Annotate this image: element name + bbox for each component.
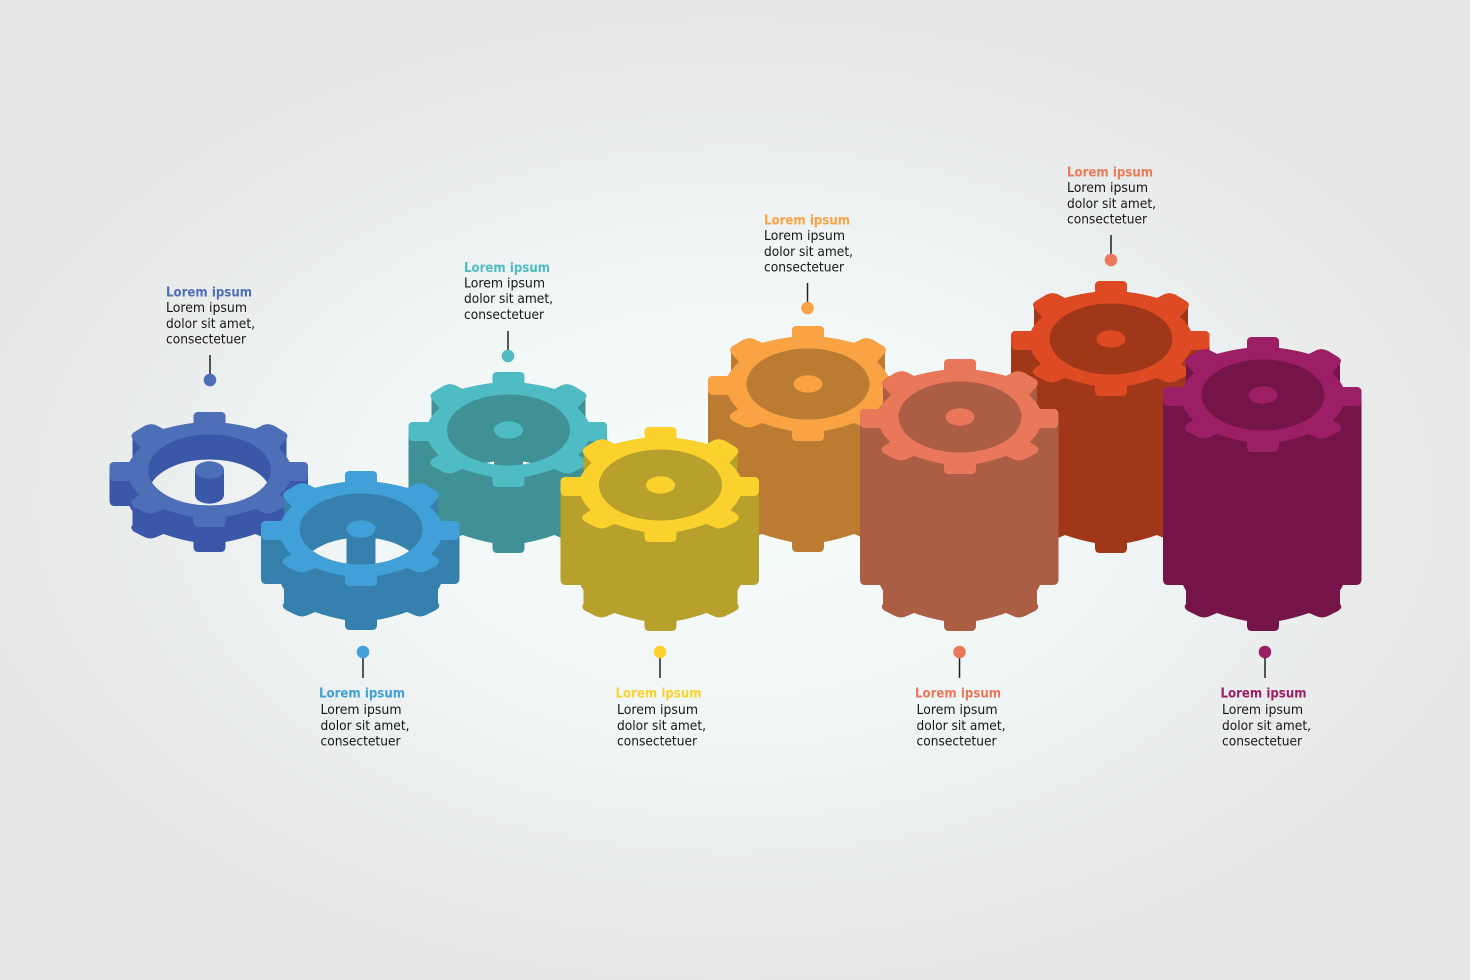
label 6: consectetuer (916, 734, 997, 750)
label 5: consectetuer (764, 260, 844, 276)
label 4: consectetuer (617, 734, 697, 750)
pin 5 (801, 283, 814, 314)
pin 4 (654, 646, 666, 678)
label 7: Lorem ipsum (1067, 181, 1148, 196)
label 3 (464, 261, 553, 323)
label 8 (1220, 686, 1311, 750)
gear 3: teal (408, 372, 607, 553)
label 3: dolor sit amet, (464, 292, 553, 307)
label 5: Lorem ipsum (764, 214, 850, 228)
label 1 (166, 286, 255, 348)
label 8: dolor sit amet, (1222, 719, 1311, 734)
label 2: consectetuer (320, 734, 401, 750)
label 6: dolor sit amet, (916, 719, 1006, 734)
label 4: Lorem ipsum (616, 686, 702, 702)
label 5: Lorem ipsum (764, 229, 845, 244)
label 8: Lorem ipsum (1220, 686, 1306, 702)
gear 5: orange (708, 326, 906, 552)
label 6 (915, 686, 1006, 750)
label 5: dolor sit amet, (764, 245, 853, 260)
label 2 (319, 686, 410, 750)
label 7: Lorem ipsum (1067, 166, 1153, 180)
label 6: Lorem ipsum (916, 703, 998, 718)
label 1: Lorem ipsum (166, 286, 252, 300)
label 7: consectetuer (1067, 212, 1147, 228)
label 1: consectetuer (166, 332, 246, 348)
label 4: Lorem ipsum (617, 703, 698, 718)
label 4 (616, 686, 706, 750)
pin 7 (1105, 235, 1117, 266)
label 8: consectetuer (1222, 734, 1302, 750)
gear 7: red-orange (1011, 281, 1210, 553)
gear 8: magenta (1163, 337, 1362, 631)
label 2: Lorem ipsum (319, 686, 405, 702)
pin 8 (1259, 646, 1271, 678)
label 5 (764, 214, 853, 276)
gear 4: yellow (560, 427, 759, 631)
label 6: Lorem ipsum (915, 686, 1001, 702)
label 7: dolor sit amet, (1067, 197, 1156, 212)
label 8: Lorem ipsum (1222, 703, 1303, 718)
gear 6: salmon (860, 359, 1058, 631)
pin 1 (204, 355, 216, 386)
label 4: dolor sit amet, (617, 719, 706, 734)
pin 3 (502, 331, 514, 362)
pin 2 (357, 646, 369, 678)
gear 1: blue, lowest (110, 412, 308, 552)
pin 6 (953, 646, 966, 678)
label 1: Lorem ipsum (166, 301, 247, 316)
gear 2: light blue (261, 471, 460, 630)
label 3: consectetuer (464, 308, 544, 323)
label 3: Lorem ipsum (464, 276, 545, 292)
label 3: Lorem ipsum (464, 261, 550, 276)
label 7 (1067, 166, 1156, 228)
label 2: Lorem ipsum (320, 703, 402, 718)
label 1: dolor sit amet, (166, 317, 255, 332)
label 2: dolor sit amet, (320, 719, 410, 734)
